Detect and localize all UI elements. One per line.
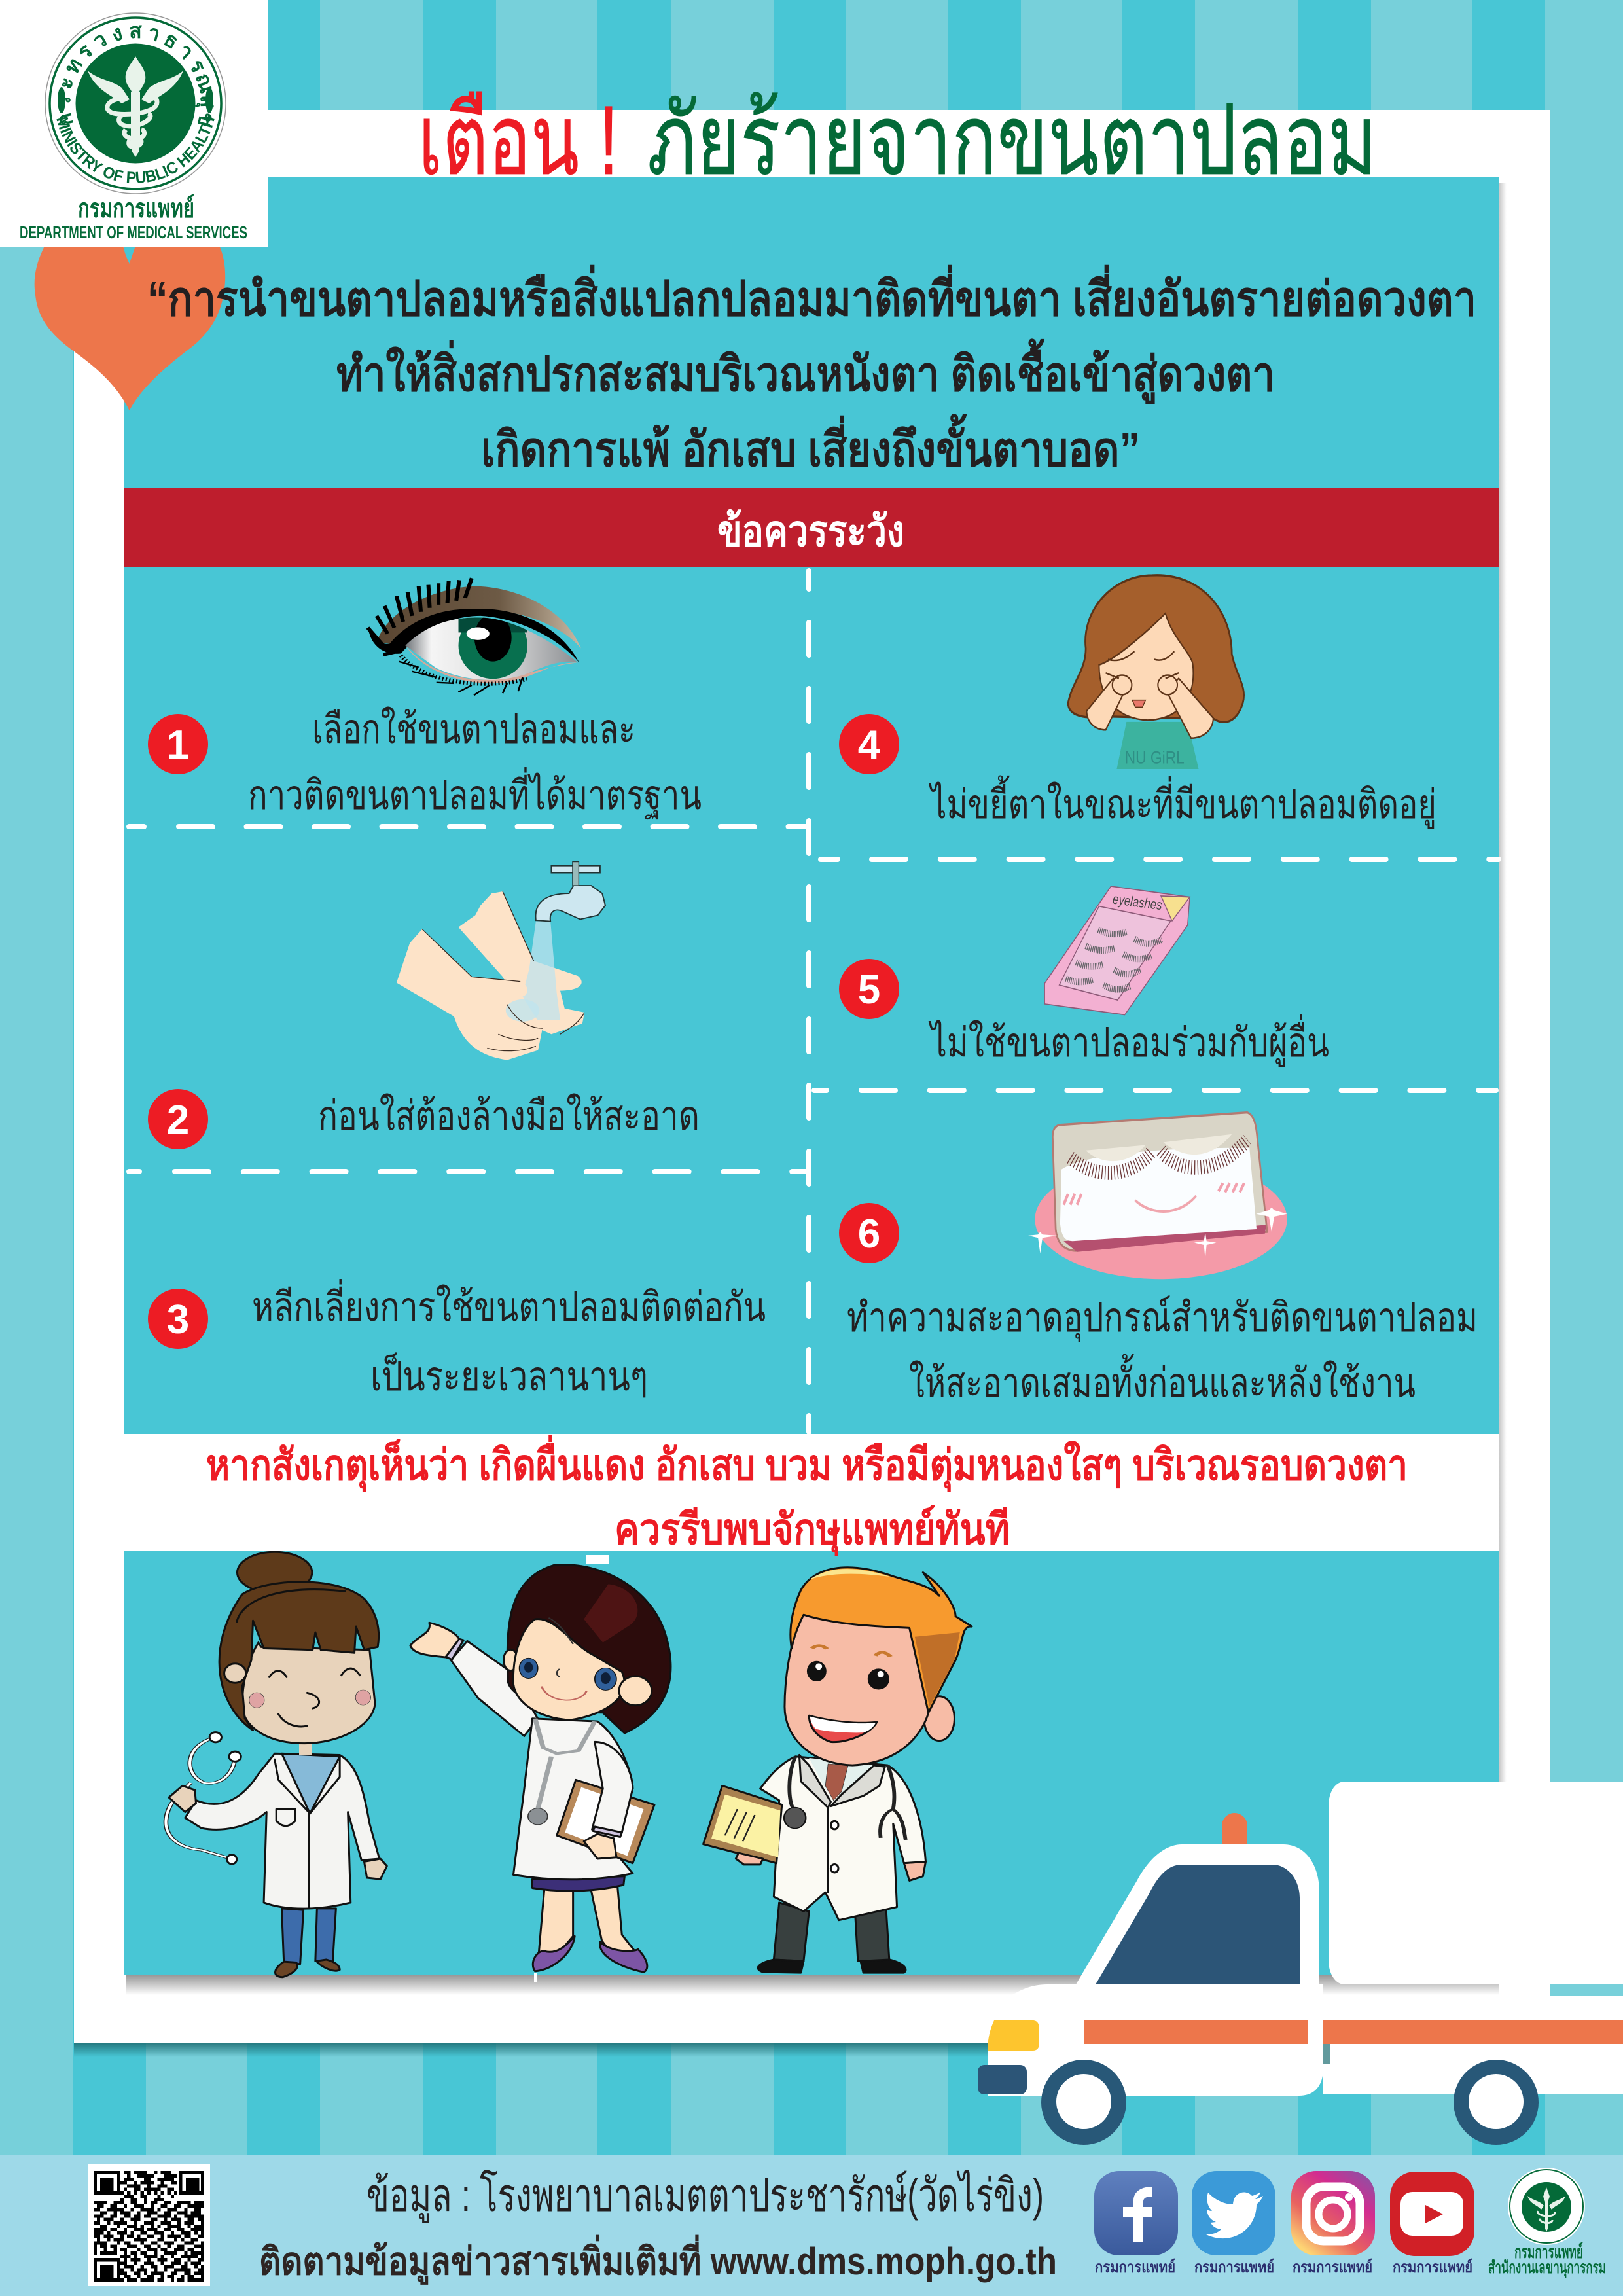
icon: girl rubbing eyes xyxy=(1068,575,1244,769)
logo: ministry of public health seal: สุ xyxy=(194,94,220,109)
red heading band xyxy=(124,488,1499,567)
icon: girl rubbing eyes: NU GiRL xyxy=(1125,749,1185,768)
front wheel xyxy=(1041,2060,1126,2145)
intro quote: เกิดการแพ้ อักเสบ เสี่ยงถึงขั้นตาบอด” xyxy=(481,414,1140,476)
icon: smiling eyelash case xyxy=(1028,1113,1287,1279)
bumper xyxy=(978,2065,1027,2094)
dashed dividers xyxy=(129,571,1499,1432)
number badge 4 xyxy=(839,714,899,774)
warning callout: ควรรีบพบจักษุแพทย์ทันที xyxy=(615,1505,1010,1556)
heart decoration xyxy=(35,234,225,410)
icon: eyelash box: eyelashes xyxy=(1112,891,1163,914)
item 1 text: กาวติดขนตาปลอมที่ได้มาตรฐาน xyxy=(248,767,702,819)
stripe xyxy=(1084,2020,1623,2044)
title xyxy=(418,85,1377,195)
logo: ministry of public health seal: ท xyxy=(60,54,87,78)
logo: ministry of public health seal: ณ xyxy=(191,70,219,96)
item 3 text: เป็นระยะเวลานานๆ xyxy=(370,1352,648,1399)
item 2 xyxy=(148,862,700,1149)
logo caption thai: กรมการแพทย์ xyxy=(78,194,194,223)
item 1 text xyxy=(248,706,702,819)
icon: hands washing under faucet xyxy=(397,862,605,1060)
doctor 3 xyxy=(704,1568,972,1973)
warning callout xyxy=(124,1434,1499,1556)
logo: ministry of public health seal: ร xyxy=(73,39,97,63)
qr code xyxy=(88,2164,210,2286)
number badge 6: 6 xyxy=(858,1211,880,1257)
number badge 5: 5 xyxy=(858,967,880,1013)
item 6 text: ให้สะอาดเสมอทั้งก่อนและหลังใช้งาน xyxy=(909,1354,1416,1406)
headlight xyxy=(988,2020,1039,2051)
main panel xyxy=(124,177,1507,1995)
item 5 text: ไม่ใช้ขนตาปลอมร่วมกับผู้อื่น xyxy=(928,1014,1329,1067)
item 3 xyxy=(148,1279,766,1399)
logo: ministry of public health seal: า xyxy=(145,20,163,46)
cab window xyxy=(1096,1865,1300,1984)
logo box: department of medical services xyxy=(0,0,268,247)
number badge 4: 4 xyxy=(858,723,881,768)
ambulance illustration xyxy=(978,1782,1623,2145)
number badge 2: 2 xyxy=(167,1098,189,1143)
logo: ministry of public health seal: ข xyxy=(193,110,219,130)
doctor 1 xyxy=(166,1552,387,1977)
icon: twitter xyxy=(1192,2171,1275,2276)
item 3 text: หลีกเลี่ยงการใช้ขนตาปลอมติดต่อกัน xyxy=(252,1279,766,1330)
number badge 5 xyxy=(839,959,899,1019)
red heading band: ข้อควรระวัง xyxy=(717,507,904,555)
ambulance rear body xyxy=(1323,1996,1623,2094)
icon: twitter: กรมการแพทย์ xyxy=(1194,2258,1274,2276)
icon: eye xyxy=(368,578,581,695)
icon: youtube: กรมการแพทย์ xyxy=(1393,2258,1472,2276)
item 1 text: เลือกใช้ขนตาปลอมและ xyxy=(312,706,635,752)
icon: instagram xyxy=(1291,2171,1375,2276)
logo: ministry of public health seal: า xyxy=(173,39,198,64)
intro quote xyxy=(147,264,1476,476)
logo: ministry of public health seal: ส xyxy=(129,19,142,43)
item 4 xyxy=(839,575,1436,829)
logo: ministry of public health seal: ร xyxy=(185,55,211,77)
warning callout: หากสังเกตุเห็นว่า เกิดผื่นแดง อักเสบ บวม หรือมีตุ่มหนองใสๆ บริเวณรอบดวงตา xyxy=(206,1434,1408,1492)
logo: ministry of public health seal: ะ xyxy=(53,74,79,92)
number badge 6 xyxy=(839,1203,899,1263)
intro quote: ทำให้สิ่งสกปรกสะสมบริเวณหนังตา ติดเชื้อเข้าสู่ดวงตา xyxy=(336,338,1275,404)
cab xyxy=(988,1844,1323,2096)
item 6 text xyxy=(847,1295,1478,1406)
logo: ministry of public health seal: ร xyxy=(51,96,75,107)
icon: instagram: กรมการแพทย์ xyxy=(1293,2258,1372,2276)
item 6 text: ทำความสะอาดอุปกรณ์สำหรับติดขนตาปลอม xyxy=(847,1295,1478,1342)
rear wheel xyxy=(1454,2060,1539,2145)
ambulance rear box xyxy=(1329,1782,1623,1984)
logo caption english: DEPARTMENT OF MEDICAL SERVICES xyxy=(20,223,247,242)
logo: ministry of public health seal: ง xyxy=(109,20,125,46)
logo: ministry of public health seal: MINISTRY OF PUBLIC HEALTH xyxy=(56,117,215,183)
item 5 xyxy=(839,886,1329,1067)
footer website text: ติดตามข้อมูลข่าวสารเพิ่มเติมที่ www.dms.moph.go.th xyxy=(259,2234,1057,2285)
white frame xyxy=(74,110,1550,2057)
title: เตือน ! xyxy=(418,85,618,195)
small seal and captions: กรมการแพทย์ xyxy=(1514,2242,1583,2262)
doctor 2 xyxy=(410,1565,671,1972)
item 4 text: ไม่ขยี้ตาในขณะที่มีขนตาปลอมติดอยู่ xyxy=(928,775,1436,829)
number badge 3: 3 xyxy=(167,1297,189,1342)
item 6 xyxy=(839,1113,1478,1406)
item 1 xyxy=(148,578,702,819)
icon: eyelash box xyxy=(1044,886,1190,1015)
footer band xyxy=(0,2155,1623,2296)
logo: ministry of public health seal: ว xyxy=(89,27,111,53)
logo: ministry of public health seal: ก xyxy=(52,111,78,128)
title: ภัยร้ายจากขนตาปลอม xyxy=(647,85,1377,195)
small white marks xyxy=(534,1555,609,1982)
siren xyxy=(1222,1813,1247,1844)
footer source text: ข้อมูล : โรงพยาบาลเมตตาประชารักษ์(วัดไร่ขิง) xyxy=(366,2169,1044,2223)
icon: facebook: กรมการแพทย์ xyxy=(1095,2258,1175,2276)
item 3 text xyxy=(252,1279,766,1399)
icon: youtube xyxy=(1390,2172,1474,2276)
number badge 2 xyxy=(148,1089,208,1149)
number badge 3 xyxy=(148,1289,208,1349)
illustration: three doctors xyxy=(166,1552,972,1977)
logo: ministry of public health seal xyxy=(45,12,226,194)
icon: facebook xyxy=(1094,2171,1178,2276)
number badge 1 xyxy=(148,714,208,774)
item 2 text: ก่อนใส่ต้องล้างมือให้สะอาด xyxy=(318,1093,700,1139)
small seal and captions xyxy=(1488,2168,1606,2278)
number badge 1: 1 xyxy=(167,723,189,768)
logo: ministry of public health seal: ธ xyxy=(160,27,183,54)
